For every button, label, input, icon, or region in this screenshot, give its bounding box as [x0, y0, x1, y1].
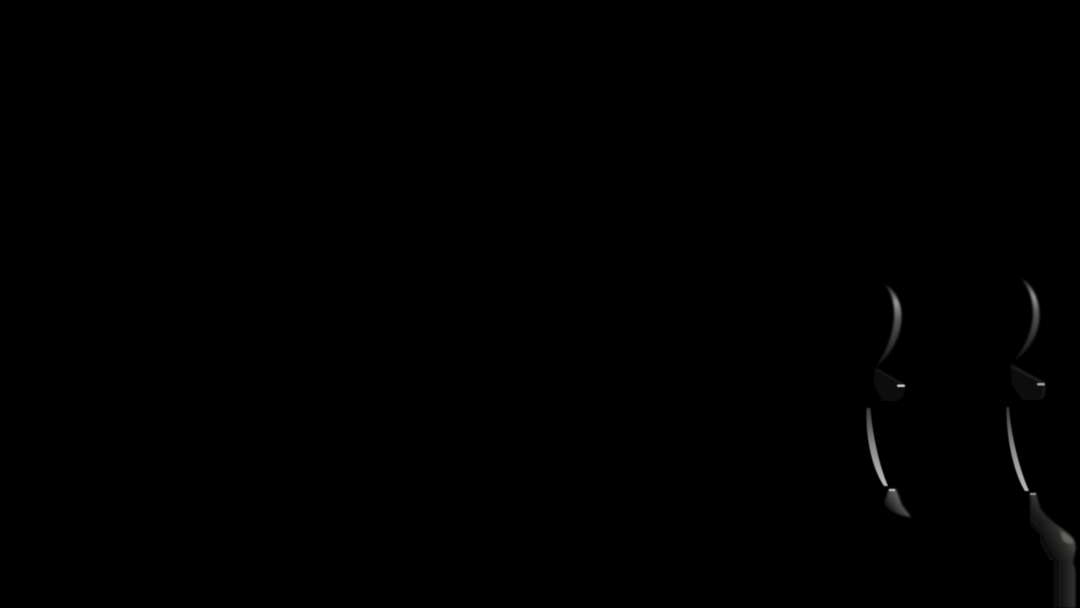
left pawn collar highlight — [897, 384, 905, 387]
left pawn collar — [874, 368, 905, 401]
right pawn collar — [1010, 365, 1044, 400]
right pawn lower base — [1045, 560, 1076, 608]
left pawn head rim light — [875, 284, 902, 368]
right pawn head rim light — [1014, 278, 1040, 361]
left pawn foot — [884, 489, 911, 517]
right pawn bulge — [1040, 522, 1076, 563]
left pawn — [866, 284, 911, 517]
right pawn shoulder highlight — [1060, 531, 1074, 543]
right pawn base — [1030, 493, 1076, 608]
right pawn stem rim light — [1006, 407, 1029, 491]
right pawn collar highlight — [1037, 383, 1045, 386]
right pawn — [1006, 278, 1076, 608]
right pawn neck flare — [1030, 493, 1060, 545]
left pawn stem rim light — [866, 408, 888, 486]
